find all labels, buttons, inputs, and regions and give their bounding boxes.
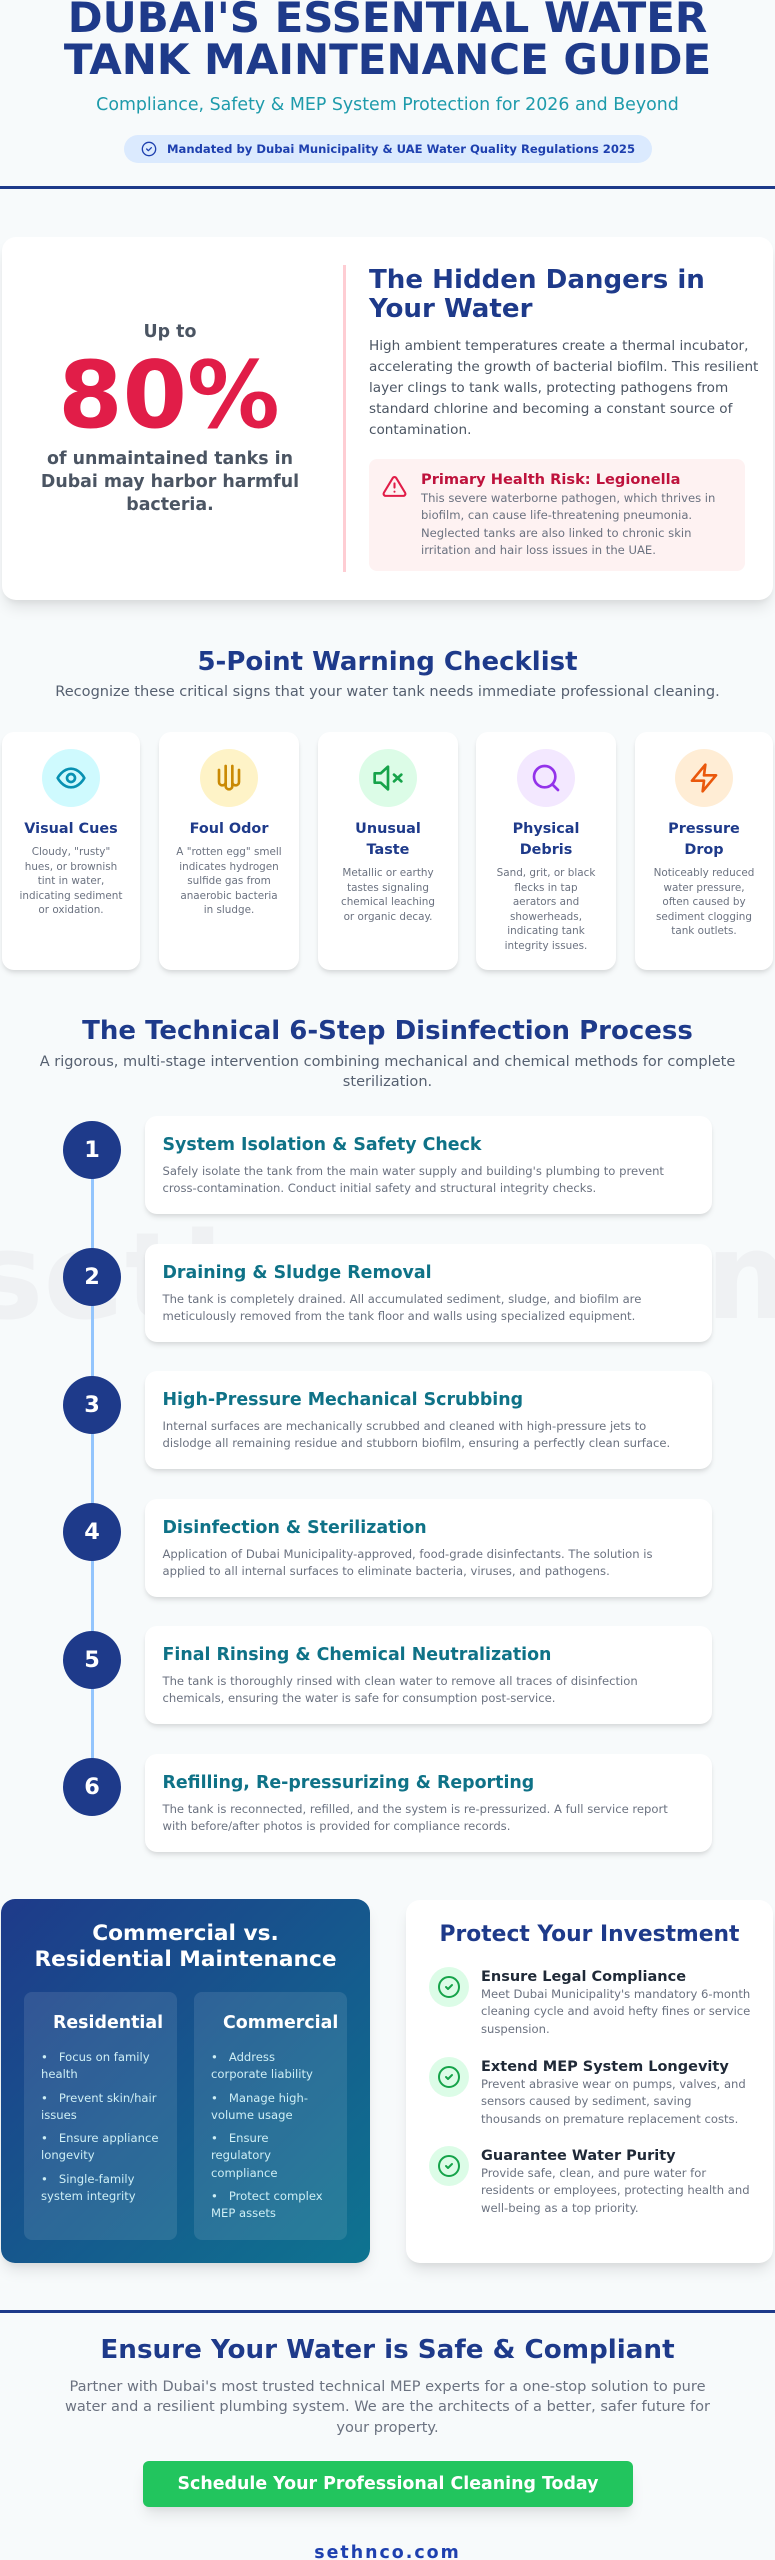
card text: indicates hydrogen xyxy=(179,860,279,872)
intro text: Recognize these critical signs that your water tank needs immediate professional cleaning. xyxy=(55,683,720,700)
card text: anaerobic bacteria xyxy=(180,890,278,902)
column list: MEP assets xyxy=(211,2206,276,2220)
column list: • Address xyxy=(211,2050,275,2064)
card text: sediment clogging xyxy=(656,910,752,922)
icon: check xyxy=(429,1967,469,2007)
column heading: Commercial xyxy=(223,2013,338,2033)
card text: sulfide gas from xyxy=(187,875,271,887)
body text: water and a resilient plumbing system. We are the architects of a better, safer future for xyxy=(65,2398,710,2415)
column list xyxy=(211,2050,323,2220)
card text xyxy=(20,846,122,916)
heading: 5-Point Warning Checklist xyxy=(197,647,578,677)
intro text xyxy=(40,1053,735,1090)
column list: issues • Ensure appliance xyxy=(41,2108,158,2145)
card text xyxy=(341,867,435,922)
column heading: Residential xyxy=(53,2013,163,2033)
callout text: Neglected tanks are also linked to chronic skin xyxy=(421,526,692,540)
icon: eye xyxy=(42,749,100,807)
stat lead-in: Up to xyxy=(144,322,196,342)
card text: aerators and xyxy=(513,896,579,908)
step 5 xyxy=(145,1626,712,1724)
callout title: Primary Health Risk: Legionella xyxy=(421,471,681,488)
card text: integrity issues. xyxy=(505,940,587,952)
step number 2 xyxy=(63,1248,121,1306)
heading: The Technical 6-Step Disinfection Process xyxy=(82,1016,693,1046)
benefit title: Extend MEP System Longevity xyxy=(481,2059,729,2075)
card title: Visual Cues xyxy=(24,821,118,837)
benefit text xyxy=(481,1987,750,2036)
benefit: MEP longevity xyxy=(429,2057,746,2126)
step number 6: 6 xyxy=(84,1774,100,1800)
column list xyxy=(41,2050,158,2203)
card text: A "rotten egg" smell xyxy=(176,846,282,858)
icon: muted speaker xyxy=(359,749,417,807)
card: pressure drop xyxy=(635,732,773,970)
stat number: 80% xyxy=(58,341,280,449)
card text: Sand, grit, or black xyxy=(497,867,595,879)
icon: check xyxy=(429,2146,469,2186)
card title: Pressure xyxy=(668,821,740,837)
step title: System Isolation & Safety Check xyxy=(162,1135,481,1155)
body text: High ambient temperatures create a thermal incubator, xyxy=(369,338,748,354)
step title: High-Pressure Mechanical Scrubbing xyxy=(162,1390,523,1410)
card text: tint in water, xyxy=(38,875,104,887)
card title xyxy=(355,821,421,858)
card title: Drop xyxy=(684,842,724,858)
card text: tastes signaling xyxy=(347,882,429,894)
step text: cross-contamination. Conduct initial safety and structural integrity checks. xyxy=(162,1181,596,1195)
icon: lightning bolt xyxy=(675,749,733,807)
card: visual cues xyxy=(2,732,140,970)
body text: Partner with Dubai's most trusted technical MEP experts for a one-stop solution to pure xyxy=(69,2378,706,2395)
card text: in sludge. xyxy=(204,904,254,916)
card title xyxy=(513,821,579,858)
icon: check xyxy=(429,2057,469,2097)
step text: Safely isolate the tank from the main water supply and building's plumbing to prevent xyxy=(162,1164,664,1178)
step text: The tank is thoroughly rinsed with clean water to remove all traces of disinfection xyxy=(162,1674,638,1688)
step number 5 xyxy=(63,1631,121,1689)
step text: meticulously removed from the tank floor and walls using specialized equipment. xyxy=(162,1309,635,1323)
step title: Final Rinsing & Chemical Neutralization xyxy=(162,1645,551,1665)
card text: indicating sediment xyxy=(20,890,122,902)
benefit text: Meet Dubai Municipality's mandatory 6-month xyxy=(481,1987,750,2001)
body text: standard chlorine and becoming a constant source of xyxy=(369,401,732,417)
benefit text: suspension. xyxy=(481,2022,550,2036)
step number 1 xyxy=(63,1121,121,1179)
heading: Ensure Your Water is Safe & Compliant xyxy=(100,2335,675,2365)
step 6 xyxy=(145,1754,712,1852)
card text: chemical leaching xyxy=(341,896,435,908)
card text: Metallic or earthy xyxy=(342,867,434,879)
step 4 xyxy=(145,1498,712,1596)
column list: health • Prevent skin/hair xyxy=(41,2067,157,2105)
step number 2: 2 xyxy=(84,1264,100,1290)
card text: showerheads, xyxy=(510,910,582,922)
badge text: Mandated by Dubai Municipality & UAE Water Quality Regulations 2025 xyxy=(167,142,635,156)
card text xyxy=(654,867,754,937)
body text xyxy=(369,338,758,438)
heading: Commercial vs. xyxy=(92,1921,279,1946)
column: residential xyxy=(24,1992,177,2240)
card: unusual taste xyxy=(318,732,458,970)
callout text: irritation and hair loss issues in the UAE. xyxy=(421,543,656,557)
column list: longevity • Single-family xyxy=(41,2148,134,2186)
intro text: sterilization. xyxy=(343,1073,432,1090)
step 3 xyxy=(145,1371,712,1469)
icon: warning triangle xyxy=(382,476,406,497)
step text: dislodge all remaining residue and stubborn biofilm, ensuring a perfectly clean surface. xyxy=(162,1436,670,1450)
body text: your property. xyxy=(336,2419,439,2436)
card text: indicating tank xyxy=(507,925,585,937)
icon: odor xyxy=(200,749,258,807)
step number 1: 1 xyxy=(84,1137,100,1163)
card text: Noticeably reduced xyxy=(654,867,754,879)
step title: Refilling, Re-pressurizing & Reporting xyxy=(162,1772,534,1792)
benefit text: residents or employees, protecting health and xyxy=(481,2183,750,2197)
heading: Residential Maintenance xyxy=(34,1947,337,1972)
benefit: water purity xyxy=(429,2146,750,2215)
title xyxy=(64,0,711,84)
benefit text: Provide safe, clean, and pure water for xyxy=(481,2166,706,2180)
button xyxy=(143,2461,633,2507)
step title: Draining & Sludge Removal xyxy=(162,1262,432,1282)
icon: magnifier xyxy=(517,749,575,807)
stat caption: bacteria. xyxy=(126,495,214,515)
column list: regulatory xyxy=(211,2148,271,2162)
step text xyxy=(162,1164,664,1195)
card text xyxy=(497,867,596,952)
column list: volume usage • Ensure xyxy=(211,2108,293,2145)
step text: The tank is completely drained. All accumulated sediment, sludge, and biofilm are xyxy=(162,1292,641,1306)
step text: Application of Dubai Municipality-approved, food-grade disinfectants. The solution is xyxy=(162,1546,652,1560)
body text: contamination. xyxy=(369,422,471,438)
callout: legionella xyxy=(369,459,745,571)
step title: Disinfection & Sterilization xyxy=(162,1518,427,1538)
column list: corporate liability • Manage high- xyxy=(211,2067,313,2105)
benefit title: Guarantee Water Purity xyxy=(481,2148,676,2164)
benefit: legal compliance xyxy=(429,1967,750,2036)
step number 6 xyxy=(63,1758,121,1816)
section: six-step process xyxy=(40,1016,735,1856)
step text xyxy=(162,1292,641,1323)
card text: or oxidation. xyxy=(38,904,104,916)
step text: applied to all internal surfaces to eliminate bacteria, viruses, and pathogens. xyxy=(162,1564,610,1578)
step text: chemicals, ensuring the water is safe for consumption post-service. xyxy=(162,1691,555,1705)
benefit text xyxy=(481,2166,750,2215)
card text xyxy=(176,846,282,916)
step number 4 xyxy=(63,1503,121,1561)
column: commercial xyxy=(194,1992,347,2240)
card title: Unusual xyxy=(355,821,421,837)
panel: hidden dangers xyxy=(2,237,773,600)
step number 3: 3 xyxy=(84,1392,100,1418)
callout text: This severe waterborne pathogen, which thrives in xyxy=(421,491,715,505)
card title xyxy=(668,821,740,858)
benefit text: cleaning cycle and avoid hefty fines or service xyxy=(481,2004,750,2018)
card title: Physical xyxy=(513,821,579,837)
step 2 xyxy=(145,1244,712,1342)
card: foul odor xyxy=(159,732,299,970)
card: physical debris xyxy=(476,732,616,970)
stat caption: of unmaintained tanks in xyxy=(47,449,293,469)
benefit text: sensors caused by sediment, saving xyxy=(481,2094,691,2108)
step number 3 xyxy=(63,1376,121,1434)
column list: • Focus on family xyxy=(41,2050,150,2064)
benefit text: well-being as a top priority. xyxy=(481,2201,639,2215)
column list: compliance • Protect complex xyxy=(211,2166,323,2203)
body text xyxy=(65,2378,710,2436)
step 1 xyxy=(145,1116,712,1214)
heading: Your Water xyxy=(369,294,532,324)
step number 4: 4 xyxy=(84,1519,100,1545)
step text xyxy=(162,1546,652,1578)
section: warning checklist xyxy=(1,647,774,974)
step text xyxy=(162,1674,638,1705)
title: TANK MAINTENANCE GUIDE xyxy=(64,35,711,84)
mandate badge xyxy=(124,135,652,163)
stat caption xyxy=(41,449,299,515)
subtitle: Compliance, Safety & MEP System Protection for 2026 and Beyond xyxy=(96,95,679,115)
card text: water pressure, xyxy=(663,882,745,894)
card title: Foul Odor xyxy=(190,821,268,837)
callout text: biofilm, can cause life-threatening pneumonia. xyxy=(421,508,692,522)
panel: protect your investment xyxy=(406,1900,773,2263)
heading: Protect Your Investment xyxy=(440,1922,739,1947)
benefit text xyxy=(481,2077,746,2126)
step text: Internal surfaces are mechanically scrubbed and cleaned with high-pressure jets to xyxy=(162,1419,646,1433)
panel: commercial vs residential xyxy=(1,1899,370,2263)
benefit title: Ensure Legal Compliance xyxy=(481,1969,686,1985)
card text: Cloudy, "rusty" xyxy=(32,846,110,858)
button: Schedule Your Professional Cleaning Today xyxy=(178,2474,598,2494)
card text: often caused by xyxy=(662,896,746,908)
step text: with before/after photos is provided for compliance records. xyxy=(162,1819,510,1833)
benefit text: thousands on premature replacement costs. xyxy=(481,2112,738,2126)
stat caption: Dubai may harbor harmful xyxy=(41,472,299,492)
heading xyxy=(34,1921,337,1972)
step number 5: 5 xyxy=(84,1647,100,1673)
icon: check badge xyxy=(142,142,156,156)
card text: hues, or brownish xyxy=(25,860,117,872)
heading: The Hidden Dangers in xyxy=(369,265,705,295)
intro text: A rigorous, multi-stage intervention combining mechanical and chemical methods for complete xyxy=(40,1053,735,1070)
benefit text: Prevent abrasive wear on pumps, valves, and xyxy=(481,2077,746,2091)
header xyxy=(0,0,775,189)
step text xyxy=(162,1419,670,1450)
card text: tank outlets. xyxy=(671,925,737,937)
callout text xyxy=(420,491,715,557)
body text: layer clings to tank walls, protecting pathogens from xyxy=(369,380,728,396)
card text: flecks in tap xyxy=(514,882,578,894)
heading xyxy=(368,265,705,324)
footer call to action xyxy=(0,2310,775,2560)
body text: accelerating the growth of bacterial biofilm. This resilient xyxy=(369,359,758,375)
card title: Debris xyxy=(520,842,572,858)
column list: system integrity xyxy=(41,2189,136,2203)
step text: The tank is reconnected, refilled, and the system is re-pressurized. A full service report xyxy=(162,1802,668,1816)
card text: or organic decay. xyxy=(344,910,432,922)
card title: Taste xyxy=(367,842,409,858)
step text xyxy=(162,1802,668,1833)
statistic: 80 percent xyxy=(41,322,299,515)
